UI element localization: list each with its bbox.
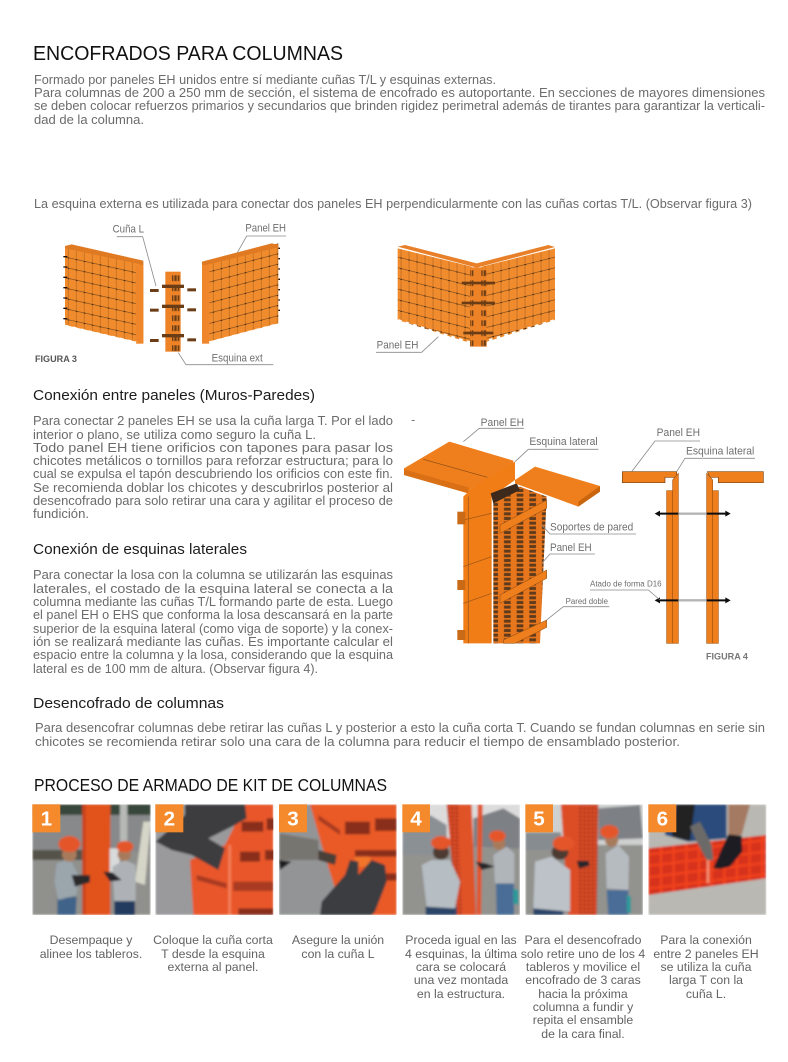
heading: kit assembly process: PROCESO DE ARMADO DE KIT DE COLUMNAS (34, 775, 387, 795)
step 3 photo (279, 804, 397, 915)
text: lateral corners: ión se realizará mediante las cuñas. Es importante calcular el (33, 635, 393, 649)
caption step 4: en la estructura. (417, 987, 505, 1001)
label: Panel EH: Panel EH (377, 339, 418, 351)
caption step 2 (153, 933, 273, 974)
number badge: 3 (287, 808, 299, 831)
figure 4 labels: Esquina lateral (686, 445, 754, 457)
caption step 3: Asegure la unión (292, 933, 384, 947)
caption step 6: se utiliza la cuña (661, 960, 752, 974)
caption step 1 (40, 933, 142, 961)
heading: stripping columns: Desencofrado de columnas (33, 695, 224, 712)
step 5 photo (525, 804, 643, 915)
text: lateral corners (33, 568, 393, 676)
step 4 photo (402, 804, 520, 915)
text: lateral corners: el panel EH o EHS que conforma la losa descansará en la parte (33, 608, 393, 622)
caption step 4 (405, 933, 517, 1001)
text: panel connection: interior o plano, se utiliza como seguro la cuña L. (33, 428, 316, 442)
text: stripping columns: chicotes se recomienda retirar solo una cara de la columna para reducir el tiempo de ensamblado posterior. (35, 735, 680, 749)
caption step 6: entre 2 paneles EH (653, 947, 759, 961)
label: Panel EH (376, 337, 438, 352)
caption step 2: Coloque la cuña corta (153, 933, 273, 947)
step 6 photo (648, 804, 766, 915)
caption step 2: T desde la esquina (161, 947, 265, 961)
text: panel connection: Para conectar 2 paneles EH se usa la cuña larga T. Por el lado (33, 414, 393, 428)
caption step 5: tableros y movilice el (526, 960, 640, 974)
text: panel connection: cual se expulsa el tapón descubriendo los orificios con este fin. (33, 467, 393, 481)
intro text: dad de la columna. (34, 113, 144, 127)
intro text: se deben colocar refuerzos primarios y secundarios que brinden rigidez perimetral además de tirantes para garantizar la verticali- (34, 99, 765, 113)
caption step 3: con la cuña L (301, 947, 375, 961)
number badge: 5 (533, 808, 545, 831)
figure 4 labels: Panel EH (550, 542, 592, 554)
section view (622, 472, 763, 643)
caption step 4: 4 esquinas, la última (405, 947, 517, 961)
title: ENCOFRADOS PARA COLUMNAS (33, 43, 343, 65)
figure 4 labels: Pared doble (566, 597, 609, 606)
figure 3: assembled corner (376, 245, 555, 352)
text: panel connection: desencofrado para solo retirar una cara y agilitar el proceso de (33, 494, 393, 508)
caption step 3 (292, 933, 384, 961)
caption step 5: de la cara final. (541, 1027, 625, 1041)
caption step 6: Para la conexión (660, 933, 752, 947)
text: panel connection: chicotes metálicos o tornillos para reforzar estructura; para lo (33, 454, 393, 468)
caption step 4: cara se colocará (416, 960, 506, 974)
label: Esquina ext: Esquina ext (212, 353, 263, 365)
caption step 4: Proceda igual en las (405, 933, 517, 947)
steps 4 to 6 photos (402, 804, 766, 915)
figure 4 labels: Atado de forma D16 (590, 580, 662, 589)
text: lateral corners: Para conectar la losa con la columna se utilizarán las esquinas (33, 568, 393, 582)
figure 4 labels: Panel EH (481, 417, 524, 429)
caption step 5: columna a fundir y (533, 1000, 634, 1014)
figure 4 labels: Esquina lateral (529, 436, 598, 448)
number badge: 6 (657, 808, 668, 831)
intro text (34, 73, 765, 127)
figure 4 labels: Panel EH (657, 427, 700, 439)
text: stripping columns: Para desencofrar columnas debe retirar las cuñas L y posterior a esto la cuña corta T. Cuando se fundan columnas en serie sin (35, 721, 765, 735)
figure 4 labels: Soportes de pared (550, 522, 633, 534)
label: Cuña L (113, 224, 156, 286)
intro text: Para columnas de 200 a 250 mm de sección, el sistema de encofrado es autoportante. En secciones de mayores dimensiones (34, 86, 765, 100)
text: lateral corners: espacio entre la columna y la losa, considerando que la esquina (33, 648, 393, 662)
text: lateral corners: lateral es de 100 mm de altura. (Observar figura 4). (33, 662, 318, 676)
figure 4 caption: FIGURA 4 (706, 651, 748, 661)
caption step 5: Para el desencofrado (525, 933, 642, 947)
caption step 5 (521, 933, 645, 1041)
caption step 1: alinee los tableros. (40, 947, 142, 961)
steps 1 to 3 photos (32, 804, 397, 915)
text: panel connection (33, 414, 393, 521)
step 2 photo (155, 804, 275, 915)
heading: lateral corners: Conexión de esquinas laterales (33, 541, 247, 558)
external corner description: La esquina externa es utilizada para conectar dos paneles EH perpendicularmente con las cuñas cortas T/L. (Observar figura 3) (34, 197, 752, 211)
text: panel connection: Todo panel EH tiene orificios con tapones para pasar los (33, 441, 393, 455)
label: Esquina ext (178, 353, 273, 365)
caption step 1: Desempaque y (50, 933, 133, 947)
figure 3 caption: FIGURA 3 (35, 354, 77, 364)
caption step 5: hacia la próxima (538, 987, 628, 1001)
figure 4 labels (463, 417, 755, 620)
caption step 6 (653, 933, 759, 1001)
text: panel connection: Se recomienda doblar los chicotes y descubrirlos posterior al (33, 481, 393, 495)
figure 4: lateral corner assembly (404, 417, 763, 661)
caption step 2: externa al panel. (168, 960, 258, 974)
perspective view (404, 420, 600, 643)
caption step 5: encofrado de 3 caras (525, 973, 641, 987)
heading: panel connection: Conexión entre paneles (Muros-Paredes) (33, 387, 315, 404)
label: Cuña L: Cuña L (113, 224, 144, 236)
number badge: 4 (410, 808, 422, 831)
text: stripping columns (35, 721, 765, 749)
text: lateral corners: superior de la esquina lateral (como viga de soporte) y la conex- (33, 622, 393, 636)
text: panel connection: fundición. (33, 507, 89, 521)
caption step 6: larga T con la (669, 973, 743, 987)
caption step 6: cuña L. (686, 987, 726, 1001)
number badge: 1 (41, 808, 52, 831)
intro text: Formado por paneles EH unidos entre sí mediante cuñas T/L y esquinas externas. (34, 73, 496, 87)
step 1 photo (32, 804, 151, 915)
label: Panel EH: Panel EH (245, 223, 286, 235)
text: lateral corners: laterales, el costado de la esquina lateral se conecta a la (33, 582, 393, 596)
figure 3: exploded panels and corner (35, 223, 286, 365)
text: lateral corners: columna mediante las cuñas T/L formando parte de esta. Luego (33, 595, 393, 609)
caption step 5: solo retire uno de los 4 (521, 947, 645, 961)
caption step 5: repita el ensamble (533, 1013, 633, 1027)
label: Panel EH (237, 223, 286, 253)
caption step 4: una vez montada (414, 973, 508, 987)
number badge: 2 (164, 808, 175, 831)
